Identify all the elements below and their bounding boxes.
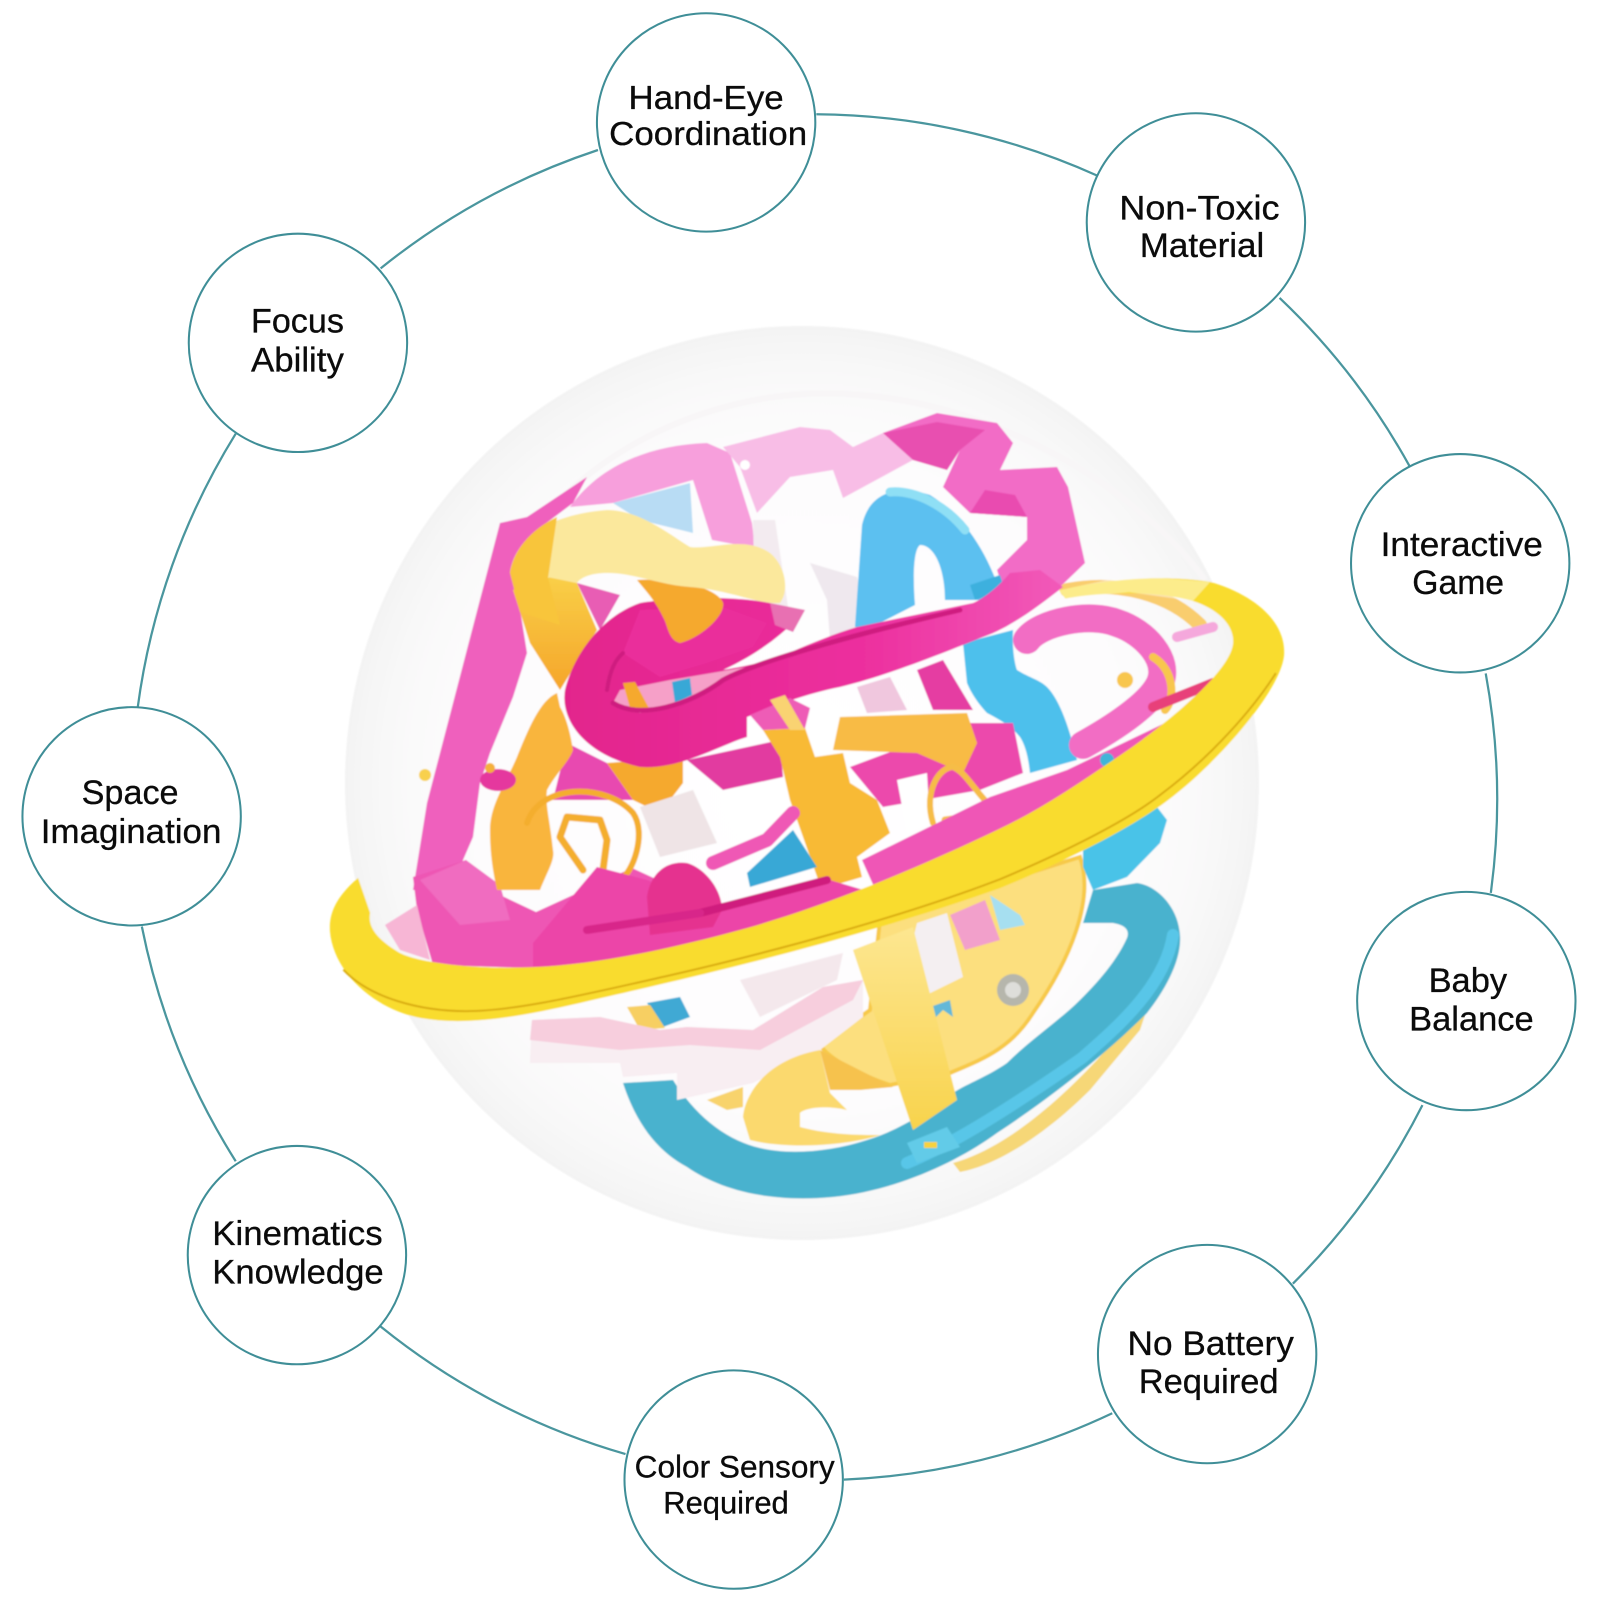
circle: Space Imagination xyxy=(22,707,241,926)
circle: Focus Ability xyxy=(189,234,407,452)
ring band xyxy=(330,578,1284,1021)
maze ball xyxy=(330,326,1284,1240)
ring seam xyxy=(343,673,1276,1011)
pink dome xyxy=(647,863,722,935)
circle: Non-Toxic Material: Non-Toxic xyxy=(1119,189,1280,227)
circle: No Battery Required: No Battery xyxy=(1128,1325,1295,1363)
circle: Interactive Game xyxy=(1351,454,1569,672)
circle: Hand-Eye Coordination: Hand-Eye xyxy=(629,80,784,117)
translucent back section xyxy=(1059,578,1210,601)
pink diagonal xyxy=(713,813,793,863)
blue lower-left piece xyxy=(747,830,817,887)
white back pieces xyxy=(753,520,867,645)
white tube xyxy=(640,790,717,857)
pale track xyxy=(530,980,863,1100)
transparent sphere xyxy=(345,326,1259,1240)
white gap xyxy=(897,773,930,833)
pink mid region xyxy=(850,723,1023,807)
circle: Kinematics Knowledge: Knowledge xyxy=(212,1254,384,1292)
circle: No Battery Required xyxy=(1098,1245,1316,1463)
yellow tube xyxy=(510,510,785,625)
dark pink tube xyxy=(687,740,783,790)
circle: Baby Balance: Balance xyxy=(1409,1001,1534,1039)
yellow arm xyxy=(833,713,977,773)
pink pillar behind xyxy=(917,660,973,710)
pink and blue seen through hemisphere xyxy=(950,895,1025,950)
circle: Baby Balance xyxy=(1357,892,1576,1110)
dome highlight xyxy=(560,393,1205,580)
circle: Baby Balance: Baby xyxy=(1429,962,1508,1000)
top zigzag track xyxy=(883,413,1085,620)
blue marks on panel xyxy=(890,947,953,1020)
orange short tube xyxy=(637,580,723,643)
yellow hemisphere xyxy=(820,857,1084,1085)
yellow front cross xyxy=(750,695,890,885)
blue and yellow pieces behind pale track xyxy=(627,997,690,1030)
blue bead xyxy=(1100,753,1114,767)
dark pink rails xyxy=(587,880,827,930)
steel ball xyxy=(997,974,1029,1006)
circle: Space Imagination: Imagination xyxy=(41,813,221,851)
blue tab xyxy=(907,1127,960,1163)
circle: Non-Toxic Material xyxy=(1087,113,1305,332)
circle: Kinematics Knowledge xyxy=(188,1146,406,1364)
pink base band xyxy=(533,867,880,990)
circle: Focus Ability: Focus xyxy=(251,303,344,341)
pale top track xyxy=(723,427,913,513)
circle: Space Imagination: Space xyxy=(82,774,179,812)
grey translucent piece xyxy=(740,953,843,1017)
circle: Color Sensory Required: Required xyxy=(663,1485,789,1520)
blue arch xyxy=(855,490,1077,773)
circle: Kinematics Knowledge: Kinematics xyxy=(212,1215,383,1253)
wire arch xyxy=(930,767,997,823)
blue lower track xyxy=(623,807,1180,1198)
lower yellow curl xyxy=(707,1050,893,1145)
pink behind tube xyxy=(577,583,620,630)
dark tip of S xyxy=(770,603,805,632)
left banana xyxy=(419,693,639,890)
circle: Focus Ability: Ability xyxy=(251,341,345,379)
yellow ring xyxy=(330,578,1284,1021)
circle: Non-Toxic Material: Material xyxy=(1140,227,1264,265)
circle: Hand-Eye Coordination xyxy=(597,13,815,232)
yellow strap xyxy=(853,927,957,1130)
pale pink arch xyxy=(570,443,755,548)
circle: Hand-Eye Coordination: Coordination xyxy=(609,116,807,153)
circle: Color Sensory Required xyxy=(624,1370,843,1589)
circle: Interactive Game: Game xyxy=(1412,564,1504,602)
main hot pink S track xyxy=(564,570,1063,767)
orange tube left xyxy=(513,577,597,690)
connecting ring lines xyxy=(138,114,1497,1480)
pale pink pillar xyxy=(857,677,907,713)
left long pink ramp xyxy=(385,477,708,968)
circle: Interactive Game: Interactive xyxy=(1381,526,1543,564)
right pink arcs xyxy=(1027,587,1213,745)
pink front band xyxy=(862,678,1215,900)
pale white panel xyxy=(900,913,963,1003)
circle: Color Sensory Required: Color Sensory xyxy=(635,1450,835,1485)
lower yellow track behind xyxy=(953,1000,1150,1172)
striped pink under track xyxy=(553,743,633,800)
orange lower tube xyxy=(607,757,683,813)
circle: No Battery Required: Required xyxy=(1139,1363,1279,1401)
